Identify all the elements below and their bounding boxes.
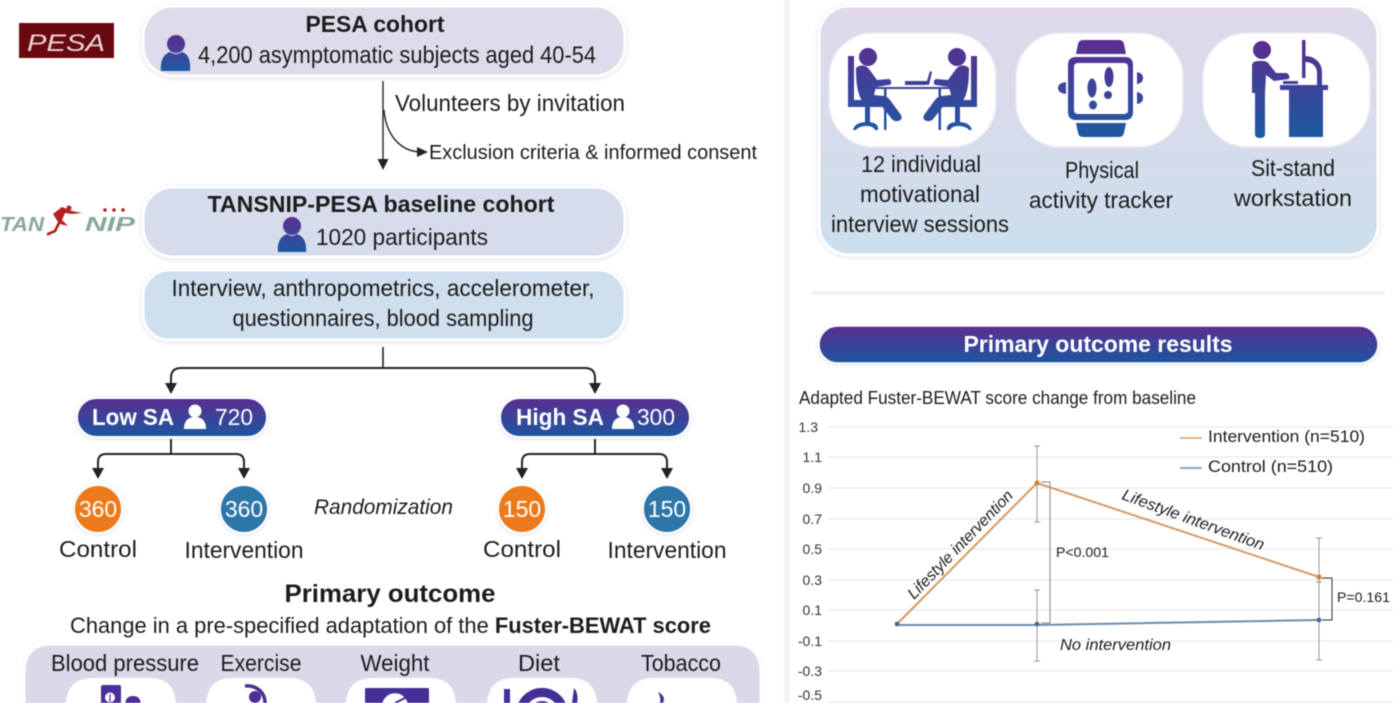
panel: Fuster-BEWAT components: Blood pressure xyxy=(51,650,199,676)
icon: person xyxy=(161,35,190,71)
panel: PESA cohort xyxy=(143,6,625,76)
icon: sit-stand workstation xyxy=(1203,33,1370,147)
text: participants: 1020 participants xyxy=(316,224,488,250)
y axis labels xyxy=(798,419,822,703)
text: activity tracker: Physical xyxy=(1065,157,1139,183)
logo: PESA: PESA xyxy=(27,30,105,57)
panel: intervention components xyxy=(819,6,1378,255)
panel: baseline assessments: questionnaires, blood sampling xyxy=(232,305,534,331)
arrows: randomization branches xyxy=(92,439,673,479)
annotation: no intervention: No intervention xyxy=(1060,637,1171,654)
panel: Fuster-BEWAT components: Tobacco xyxy=(641,650,721,676)
bracket: P=0.161 xyxy=(1322,578,1390,620)
pill: Low SA: Low SA xyxy=(92,404,174,430)
logo: TANSNIP: NIP xyxy=(85,214,136,236)
text: interview sessions: interview sessions xyxy=(831,211,1009,237)
heading: PESA cohort: PESA cohort xyxy=(306,11,445,37)
bracket: P=0.161: P=0.161 xyxy=(1337,589,1390,605)
arrow: PESA to TANSNIP xyxy=(378,81,428,170)
logo: PESA xyxy=(19,23,114,58)
chart: score change xyxy=(798,388,1393,703)
group: low SA control xyxy=(59,485,137,562)
divider xyxy=(811,291,1385,295)
group: low SA intervention: Intervention xyxy=(184,537,304,563)
arrows: split by SA xyxy=(165,347,601,394)
icon: activity tracker xyxy=(1016,33,1183,147)
icon: exercise xyxy=(206,678,316,703)
text: workstation xyxy=(1233,155,1352,211)
group: low SA intervention xyxy=(184,485,304,563)
text: subjects: 4,200 asymptomatic subjects aged 40-54 xyxy=(198,42,596,69)
heading: primary outcome: Primary outcome xyxy=(284,580,496,608)
group: high SA intervention: Intervention xyxy=(608,537,726,563)
panel: TANSNIP-PESA baseline xyxy=(143,187,625,257)
group: high SA control: 150 xyxy=(503,496,541,522)
divider xyxy=(784,0,790,703)
y axis labels: 0.3 xyxy=(803,572,822,588)
group: high SA intervention: 150 xyxy=(648,496,686,522)
panel: Fuster-BEWAT components xyxy=(24,644,761,703)
text: exclusion: Exclusion criteria & informed consent xyxy=(429,142,757,164)
y axis labels: 0.7 xyxy=(803,511,822,527)
chart title: Adapted Fuster-BEWAT score change from baseline xyxy=(799,388,1196,408)
text: interview sessions: 12 individual xyxy=(861,151,981,177)
y axis labels: 1.1 xyxy=(803,449,822,465)
grid lines xyxy=(828,427,1393,702)
group: low SA intervention: 360 xyxy=(225,496,263,522)
icon: blood pressure xyxy=(66,678,176,703)
y axis labels: -0.5 xyxy=(798,687,822,703)
panel: Fuster-BEWAT components: Weight xyxy=(360,650,430,676)
text: workstation: workstation xyxy=(1233,185,1352,211)
left person xyxy=(848,48,902,130)
pill: High SA xyxy=(500,398,690,437)
group: low SA control: 360 xyxy=(79,496,117,522)
text: interview sessions: motivational xyxy=(860,181,980,207)
y axis labels: 1.3 xyxy=(799,419,818,435)
text: volunteers: Volunteers by invitation xyxy=(395,90,625,116)
group: high SA control xyxy=(483,485,561,562)
pill: High SA: High SA xyxy=(516,404,604,430)
heading: baseline cohort: TANSNIP-PESA baseline cohort xyxy=(208,191,555,217)
series: control xyxy=(895,618,1321,626)
y axis labels: 0.9 xyxy=(803,480,822,496)
legend xyxy=(1180,427,1365,476)
icon: person xyxy=(278,217,306,252)
group: high SA intervention xyxy=(608,485,726,563)
legend: Intervention (n=510) xyxy=(1208,427,1365,446)
group: low SA control: Control xyxy=(59,536,137,562)
y axis labels: -0.1 xyxy=(798,633,822,649)
logo: TANSNIP: TAN xyxy=(0,214,45,236)
text: activity tracker xyxy=(1029,157,1173,213)
panel: Fuster-BEWAT components: Diet xyxy=(518,650,561,676)
text: activity tracker: activity tracker xyxy=(1029,187,1173,213)
icon: interview sessions xyxy=(829,33,996,147)
series: intervention xyxy=(895,480,1322,626)
annotation: falling lifestyle intervention: Lifestyle intervention xyxy=(1120,487,1266,554)
group: high SA control: Control xyxy=(483,536,561,562)
heading bar: primary outcome results: Primary outcome results xyxy=(964,331,1232,357)
legend: Control (n=510) xyxy=(1208,457,1333,476)
text: randomization: Randomization xyxy=(314,496,453,519)
pill: Low SA xyxy=(77,398,267,437)
pill: Low SA: 720 xyxy=(215,404,253,430)
bracket: P<0.001: P<0.001 xyxy=(1056,544,1109,560)
panel: Fuster-BEWAT components: Exercise xyxy=(220,650,302,676)
text: primary outcome description: Change in a pre-specified adaptation of the Fuster-BEWAT score xyxy=(70,613,711,638)
icon: weight xyxy=(346,678,456,703)
annotation: rising lifestyle intervention: Lifestyle intervention xyxy=(905,487,1017,603)
y axis labels: -0.3 xyxy=(798,663,822,679)
text: interview sessions xyxy=(831,151,1009,237)
y axis labels: 0.5 xyxy=(803,541,822,557)
icon: tobacco xyxy=(627,678,737,703)
text: workstation: Sit-stand xyxy=(1251,155,1335,181)
heading bar: primary outcome results xyxy=(819,326,1378,363)
panel: baseline assessments: Interview, anthropometrics, accelerometer, xyxy=(172,275,594,301)
y axis labels: 0.1 xyxy=(803,602,822,618)
logo: TANSNIP xyxy=(0,206,136,236)
error bars xyxy=(1034,446,1322,661)
pill: High SA: 300 xyxy=(637,404,675,430)
bracket: P<0.001 xyxy=(1041,482,1109,623)
panel: baseline assessments xyxy=(143,270,625,340)
icon: diet xyxy=(487,678,597,703)
right person xyxy=(923,48,977,130)
